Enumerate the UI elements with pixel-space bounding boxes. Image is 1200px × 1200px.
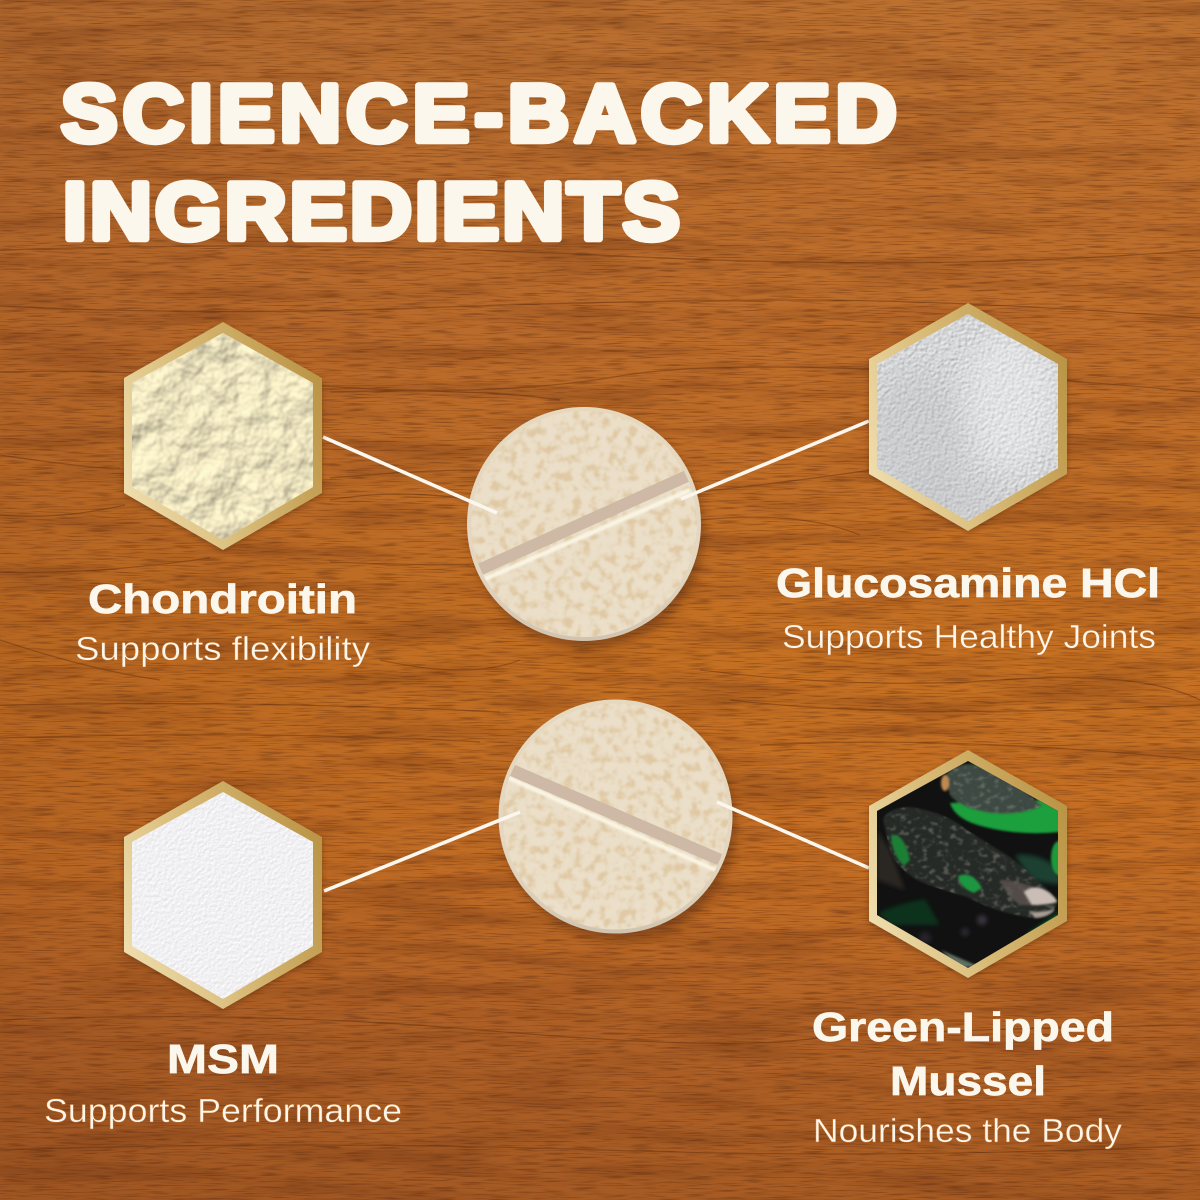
shell speckle (883, 807, 1057, 918)
label: MSM: MSM (167, 1036, 279, 1082)
title (61, 69, 902, 257)
label: MSM: Supports Performance (44, 1092, 402, 1129)
title: INGREDIENTS (63, 167, 683, 257)
title: SCIENCE-BACKED (61, 69, 902, 159)
label: Glucosamine HCl: Supports Healthy Joints (782, 618, 1156, 655)
label: Green-Lipped Mussel: Green-Lipped (812, 1004, 1114, 1050)
upper mussel (941, 764, 1067, 875)
main mussel shell (883, 807, 1057, 918)
shell details (891, 835, 1057, 968)
label: Chondroitin: Supports flexibility (75, 630, 371, 667)
label: Green-Lipped Mussel (812, 1004, 1123, 1149)
label: Green-Lipped Mussel: Mussel (890, 1058, 1046, 1104)
label: MSM (44, 1036, 402, 1129)
connector lines (323, 421, 869, 891)
upper shell speckle (945, 764, 1042, 814)
hexagon: chondroitin powder (124, 322, 325, 552)
label: Glucosamine HCl (776, 560, 1160, 655)
tablet: top (465, 405, 705, 649)
label: Chondroitin (75, 576, 371, 667)
hexagon: green-lipped mussel (869, 750, 1070, 980)
label: Chondroitin: Chondroitin (88, 576, 357, 622)
backdrop glows (877, 830, 1060, 945)
tablet: bottom (495, 695, 736, 941)
hexagon: MSM powder (124, 781, 325, 1011)
label: Green-Lipped Mussel: Nourishes the Body (813, 1112, 1123, 1149)
hexagon: glucosamine crystals (865, 303, 1070, 533)
label: Glucosamine HCl: Glucosamine HCl (776, 560, 1160, 606)
